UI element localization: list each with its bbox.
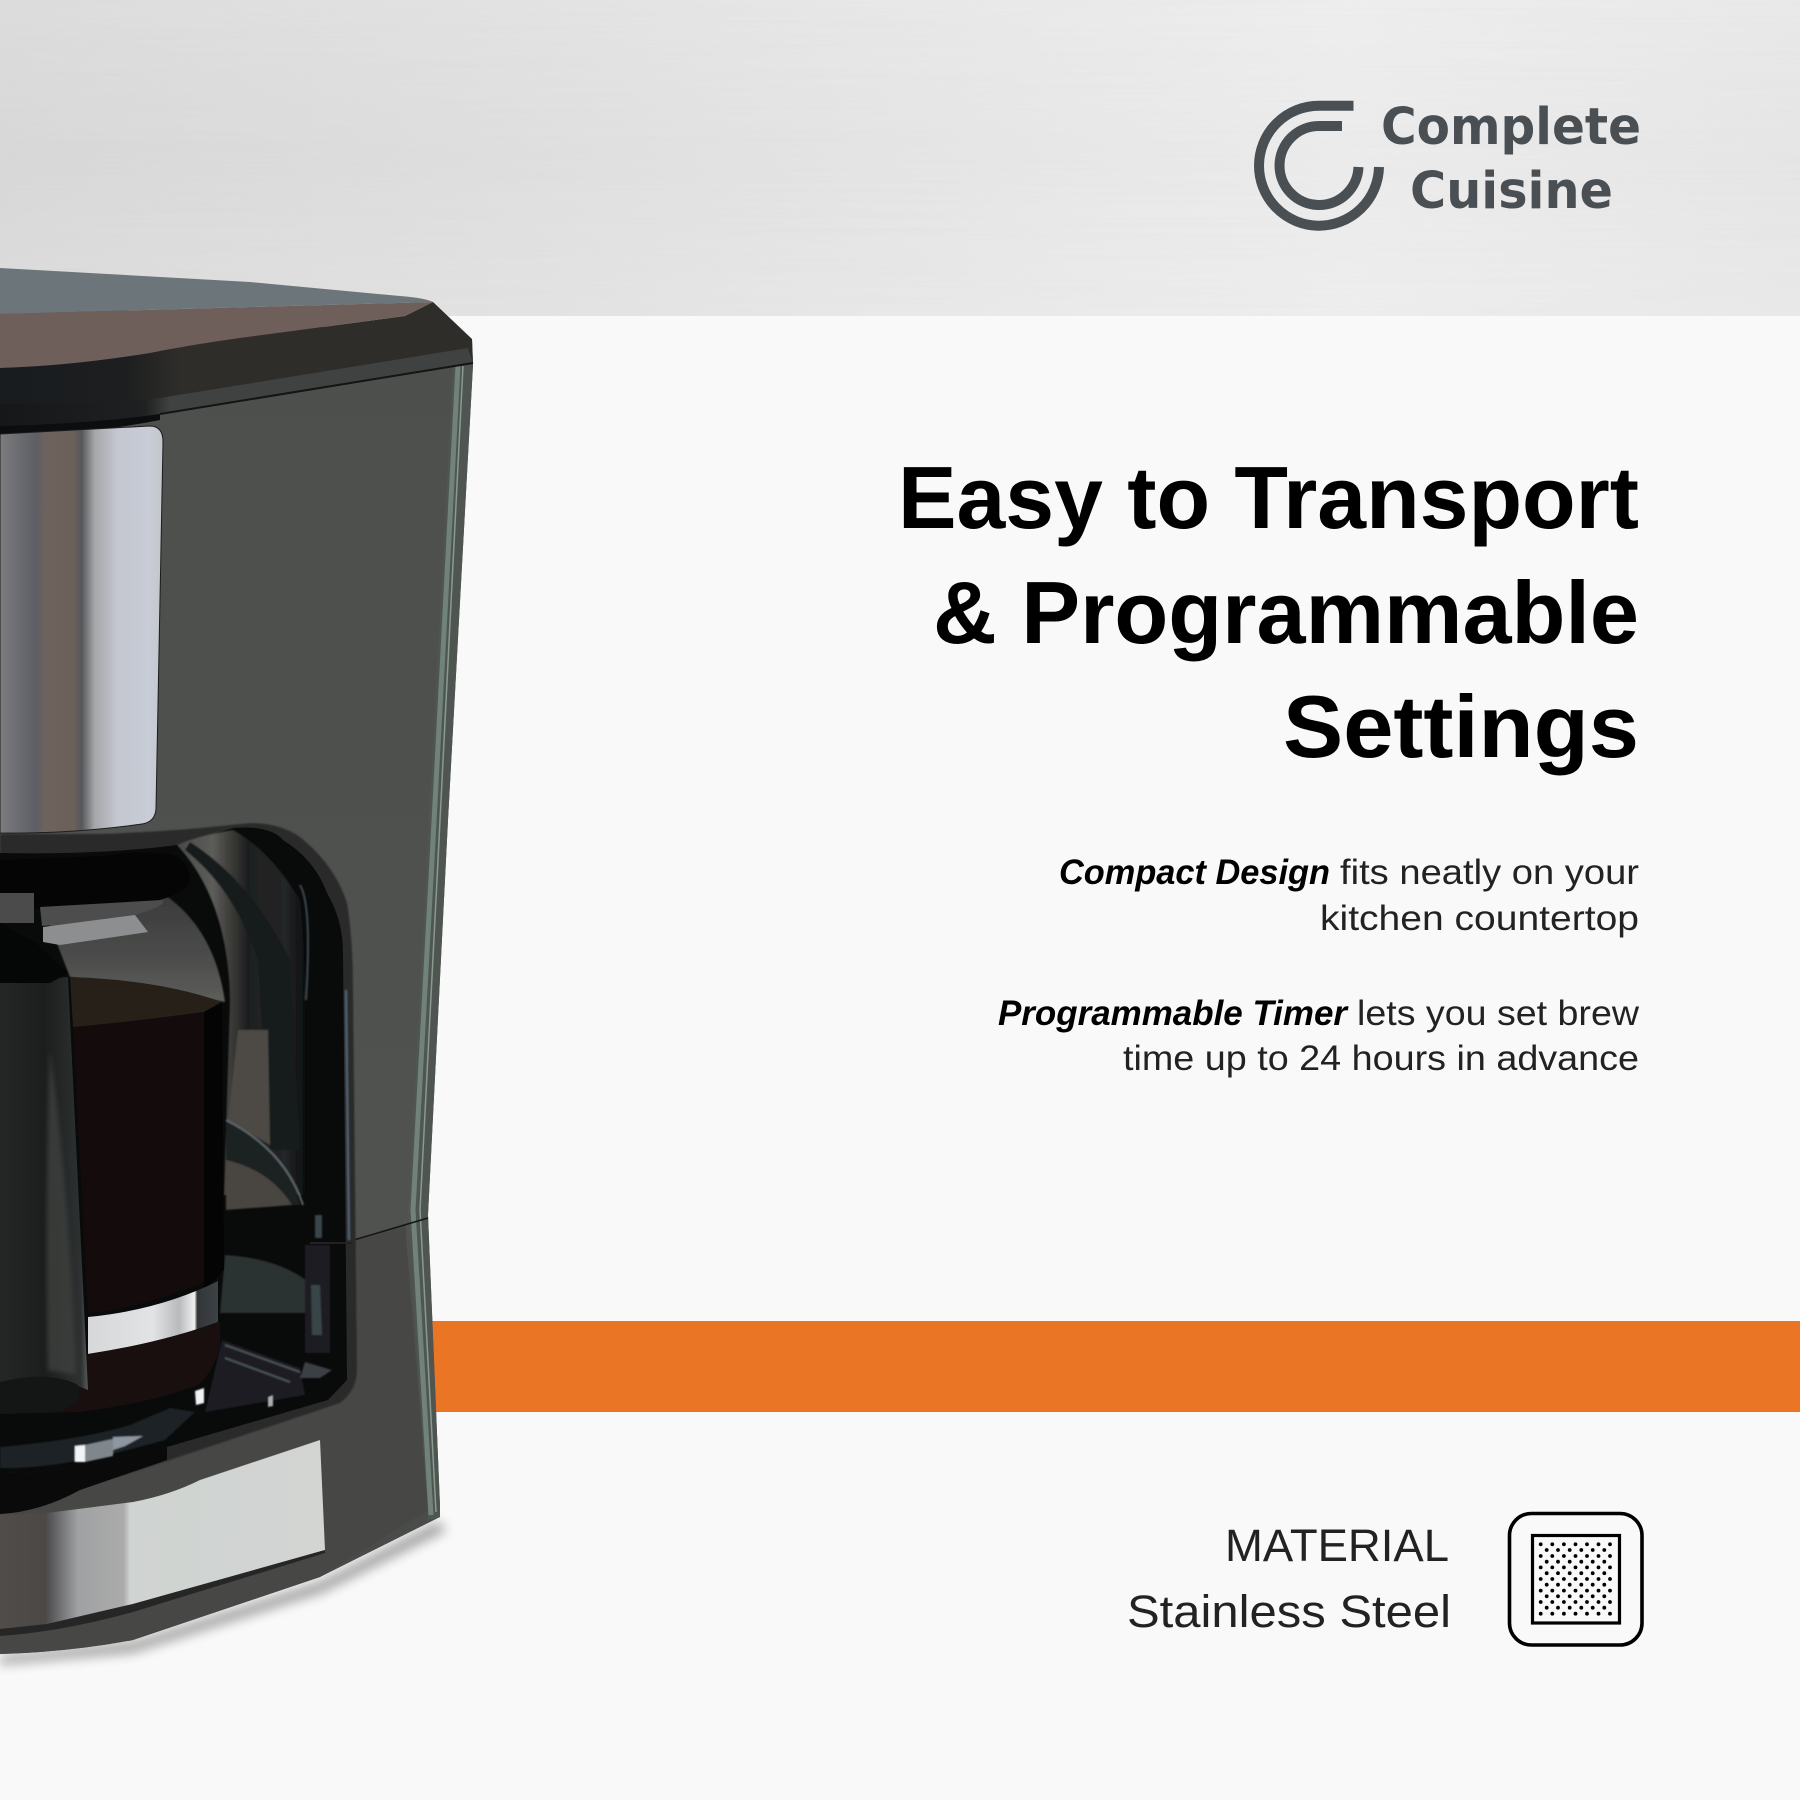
feature text: compact design: Compact Design — [1059, 853, 1330, 892]
logo wordmark: Complete — [1381, 98, 1641, 157]
logo wordmark — [1381, 98, 1641, 221]
material label — [1127, 1520, 1451, 1637]
base lower section — [0, 1224, 428, 1654]
steel water tank panel — [0, 426, 163, 833]
feature text: compact design — [1059, 853, 1639, 938]
product: coffee maker — [0, 268, 473, 1664]
lid top brown face — [0, 302, 433, 368]
carafe interior details — [40, 830, 349, 1412]
glass shoulder — [40, 895, 225, 1002]
glass bottom section — [220, 1255, 306, 1313]
base shadow — [0, 1522, 446, 1664]
icon: material texture — [1510, 1514, 1642, 1645]
brown light reflection — [228, 1030, 270, 1145]
feature text: programmable timer: time up to 24 hours in advance — [1123, 1039, 1639, 1078]
logo: Complete Cuisine — [1259, 98, 1641, 226]
carafe base — [0, 1322, 220, 1414]
handle cap — [0, 923, 68, 983]
heading: & Programmable — [933, 563, 1639, 662]
black band under window — [0, 1447, 167, 1514]
base dark lower lip — [0, 1550, 325, 1636]
feature text: compact design: kitchen countertop — [1320, 899, 1639, 938]
feature text: programmable timer: Programmable Timer — [998, 994, 1349, 1033]
right frame glare line — [346, 990, 349, 1240]
carafe handle — [0, 977, 88, 1390]
body right edge highlight — [408, 365, 473, 1520]
carafe window interior — [0, 828, 347, 1473]
chrome ring — [88, 1281, 218, 1354]
coffee in carafe — [73, 1012, 204, 1314]
hot plate chrome highlights — [0, 1388, 273, 1468]
lower glass arc — [226, 1120, 300, 1205]
seam through window — [310, 1242, 352, 1244]
feature text: programmable timer — [998, 994, 1640, 1078]
right inner frame column — [305, 1245, 330, 1353]
lid rim — [0, 302, 473, 432]
handle soft highlight — [47, 1050, 76, 1375]
bottom reflective lines — [205, 1340, 305, 1412]
logo mark: double C rings — [1259, 106, 1379, 226]
feature text: programmable timer: lets you set brew — [1357, 994, 1640, 1033]
heading — [898, 448, 1639, 776]
carafe neck light patch — [43, 915, 148, 945]
handle lower opening — [0, 1377, 80, 1414]
material label: Stainless Steel — [1127, 1586, 1451, 1637]
lid rim lower band — [0, 348, 473, 432]
carafe dark right wall — [204, 1002, 224, 1290]
glass diagonal dark reflection — [185, 842, 300, 1150]
material label: MATERIAL — [1225, 1520, 1449, 1571]
carafe lid lower plate — [40, 900, 164, 926]
brushed metal header band — [0, 0, 1800, 316]
lid top grey face — [0, 268, 433, 314]
carafe lid — [0, 852, 190, 910]
heading: Settings — [1283, 677, 1639, 776]
orange band — [0, 1321, 1800, 1412]
steel control strip — [0, 1440, 325, 1629]
heading: Easy to Transport — [898, 448, 1639, 547]
coffee surface — [70, 977, 222, 1027]
glass right reflections — [177, 830, 305, 1195]
feature text: compact design: fits neatly on your — [1340, 853, 1639, 892]
machine body — [0, 300, 473, 1654]
window surround dark rim — [0, 823, 357, 1497]
logo wordmark: Cuisine — [1410, 162, 1613, 221]
